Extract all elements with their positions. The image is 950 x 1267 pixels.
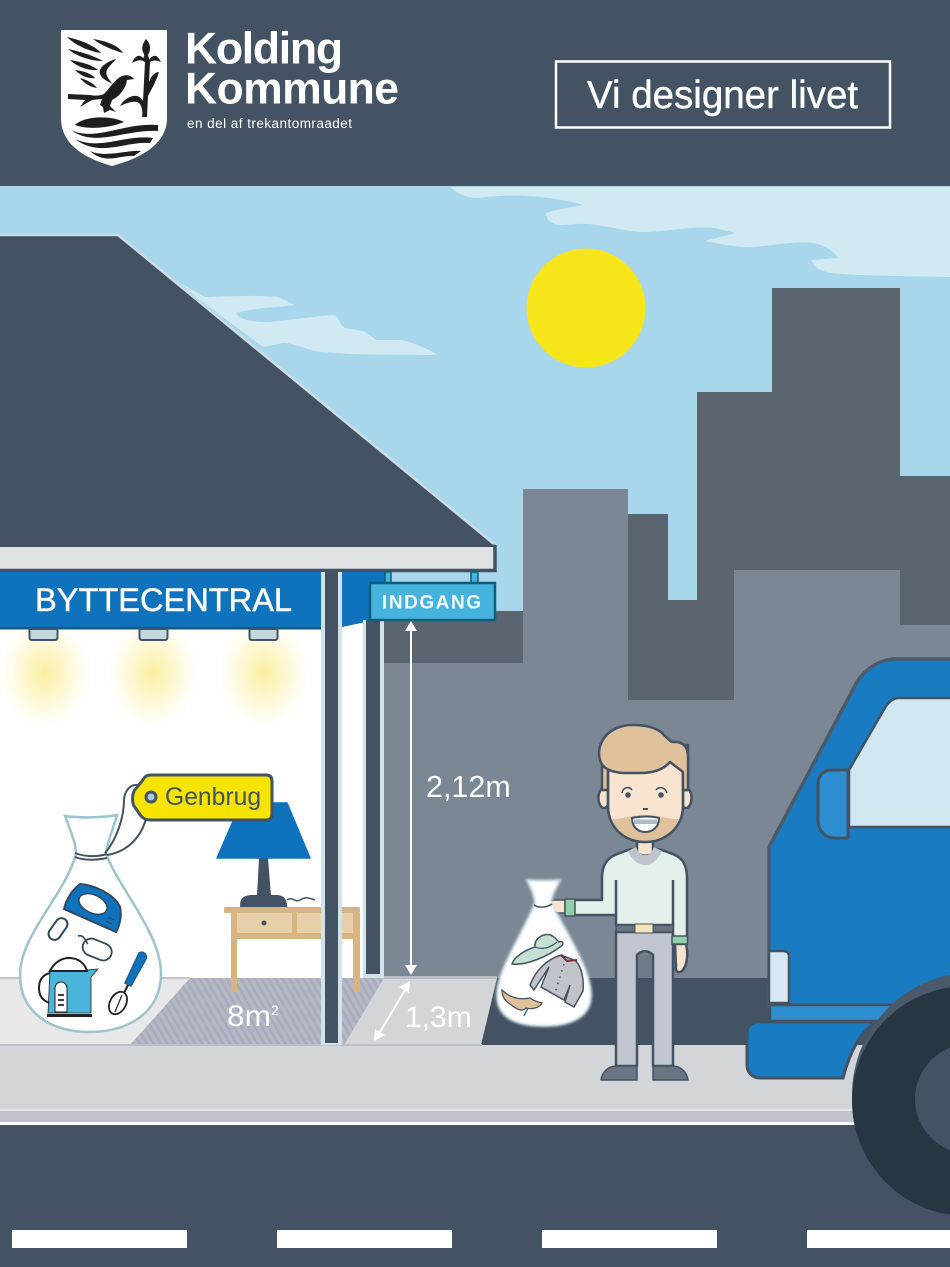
width arrow xyxy=(374,981,410,1041)
cloud: upper right xyxy=(450,187,950,277)
windscreen xyxy=(849,698,950,827)
headlight xyxy=(769,951,789,1003)
right arm hand and cuff xyxy=(675,944,687,972)
eyes xyxy=(625,792,631,798)
city buildings: dark xyxy=(384,288,950,700)
lamp xyxy=(240,895,287,907)
shoes xyxy=(601,1066,637,1080)
shop floor: left xyxy=(0,978,200,1045)
price tag: Genbrug xyxy=(132,775,272,820)
kettle xyxy=(39,973,50,1003)
awning over entrance xyxy=(342,572,385,627)
table xyxy=(231,913,360,992)
collar xyxy=(628,847,662,865)
slogan box: Vi designer livet xyxy=(587,74,858,117)
hub xyxy=(915,1044,950,1154)
side mirror xyxy=(818,770,848,838)
shop sign: BYTTECENTRAL xyxy=(0,572,321,630)
city buildings: light xyxy=(384,489,950,1000)
pavement xyxy=(0,1044,950,1125)
beard xyxy=(609,815,682,841)
sky xyxy=(0,186,950,686)
hill and water waves xyxy=(75,117,124,128)
sleeve and torso xyxy=(574,849,687,937)
jacket xyxy=(530,955,583,1007)
logo wordmark xyxy=(185,24,399,131)
shop sign: BYTTECENTRAL: BYTTECENTRAL xyxy=(35,581,292,618)
price tag: Genbrug: Genbrug xyxy=(165,784,261,811)
height arrow xyxy=(405,621,417,975)
cab body xyxy=(769,659,950,1005)
belt xyxy=(616,925,673,932)
floor area 8m2 hatched xyxy=(130,978,385,1045)
bag tie xyxy=(75,853,107,860)
left hand and cuff xyxy=(545,900,565,913)
shop pillars xyxy=(321,572,384,1045)
shop interior xyxy=(0,620,384,980)
whisk xyxy=(125,952,146,986)
entrance sign: INDGANG: INDGANG xyxy=(382,592,481,614)
dark kerb band xyxy=(470,978,950,1048)
fender xyxy=(852,972,950,1218)
hair top xyxy=(599,725,688,790)
logo wordmark: Kolding xyxy=(185,24,343,74)
hair back xyxy=(602,745,688,790)
truck xyxy=(747,659,950,1218)
recycling bag: electronics xyxy=(20,785,161,1032)
header bar xyxy=(0,0,950,186)
mouth xyxy=(632,816,659,832)
slogan box xyxy=(556,62,890,128)
face xyxy=(608,760,683,842)
eagle xyxy=(67,37,134,113)
logo wordmark: Kommune xyxy=(185,64,399,114)
hand mixer xyxy=(64,884,121,932)
lamp and table xyxy=(217,803,360,992)
nose xyxy=(643,808,648,810)
tyre xyxy=(852,986,950,1216)
logo: coat of arms xyxy=(61,30,167,166)
eaves xyxy=(0,545,495,570)
legs xyxy=(616,932,673,1066)
cloud: over roof xyxy=(180,283,438,355)
lower strip xyxy=(770,1005,900,1021)
ears xyxy=(598,788,610,808)
hat xyxy=(512,935,563,964)
reed plant xyxy=(120,39,161,117)
sun xyxy=(526,248,646,368)
entrance mat xyxy=(344,978,497,1045)
shoe xyxy=(502,990,542,1010)
logo wordmark: en del af trekantomraadet xyxy=(187,116,352,131)
floor label 8m2: 2 xyxy=(271,1002,279,1018)
road xyxy=(0,1125,950,1267)
person xyxy=(545,725,692,1080)
light glows xyxy=(0,617,310,729)
width label: 1,3m xyxy=(405,1001,472,1034)
floor label 8m2: 8m xyxy=(227,1000,271,1033)
computer mouse xyxy=(80,936,114,963)
neck xyxy=(637,838,653,858)
entrance sign: INDGANG xyxy=(370,572,495,620)
height label: 2,12m xyxy=(426,770,511,804)
recycling bag: clothes xyxy=(497,880,591,1026)
roof xyxy=(0,235,495,547)
bumper xyxy=(747,1022,875,1078)
ceiling lights xyxy=(30,629,278,640)
